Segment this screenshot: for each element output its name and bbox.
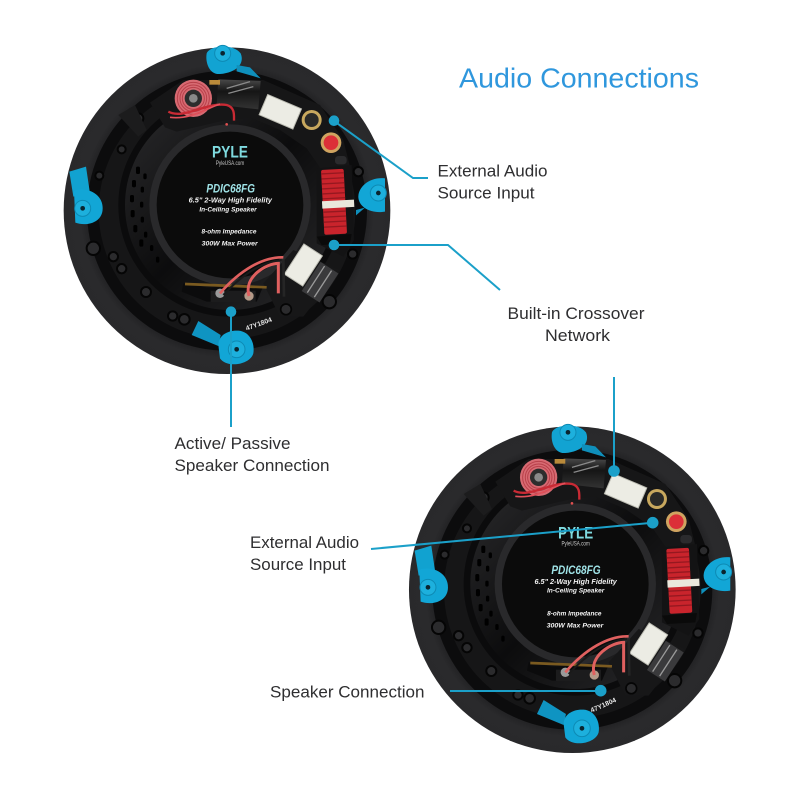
dot: external audio (top) bbox=[329, 115, 339, 126]
speaker label text: top unit: In-Ceiling Speaker bbox=[199, 207, 257, 214]
callout: external audio source input (top) bbox=[329, 115, 548, 202]
speaker artwork: bottom unit bbox=[409, 424, 736, 753]
text: active passive: Speaker Connection bbox=[174, 456, 330, 475]
text: external audio (bottom): Source Input bbox=[250, 555, 346, 574]
callout: built-in crossover network bbox=[329, 240, 645, 345]
dot: external audio (bottom) bbox=[647, 517, 658, 528]
text: external audio (top): External Audio bbox=[438, 162, 548, 181]
speaker label text: top unit: PyleUSA.com bbox=[216, 161, 244, 167]
speaker label text: bottom unit: 300W Max Power bbox=[547, 622, 604, 629]
dot: crossover bbox=[329, 240, 339, 250]
speaker label text: bottom unit: In-Ceiling Speaker bbox=[547, 588, 605, 595]
leader line: crossover bbox=[334, 245, 500, 290]
title: Audio Connections bbox=[459, 62, 699, 94]
text: crossover: Network bbox=[545, 326, 611, 345]
leader line: active passive bbox=[230, 312, 232, 427]
leader line: crossover (bottom) bbox=[613, 377, 615, 471]
speaker label text: top unit: 8-ohm Impedance bbox=[201, 230, 257, 236]
dot: crossover (bottom) bbox=[608, 465, 620, 477]
text: speaker connection: Speaker Connection bbox=[270, 683, 424, 702]
speaker label text: top unit: PDIC68FG bbox=[206, 181, 255, 195]
callout: external audio source input (bottom) bbox=[250, 517, 658, 574]
speaker label text: top unit bbox=[189, 142, 273, 333]
text: external audio (top): Source Input bbox=[438, 184, 535, 202]
dot: active passive bbox=[226, 306, 236, 317]
speaker: top unit bbox=[64, 45, 390, 374]
callout: active / passive speaker connection bbox=[174, 306, 330, 475]
leader line: external audio (bottom) bbox=[371, 523, 653, 549]
speaker label text: bottom unit: 47Y1804 bbox=[590, 697, 618, 714]
callout: crossover (bottom) bbox=[608, 377, 620, 477]
text: external audio (bottom): External Audio bbox=[250, 533, 359, 552]
leader line: speaker connection bbox=[450, 690, 600, 692]
leader line: external audio (top) bbox=[334, 121, 428, 178]
text: crossover: Built-in Crossover bbox=[508, 304, 645, 323]
speaker artwork: top unit bbox=[64, 45, 390, 374]
speaker label text: bottom unit: 6.5" 2-Way High Fidelity bbox=[534, 579, 618, 586]
speaker label text: top unit: 6.5" 2-Way High Fidelity bbox=[189, 198, 273, 205]
speaker label text: bottom unit: 8-ohm Impedance bbox=[547, 611, 602, 617]
speaker label text: bottom unit bbox=[534, 523, 618, 714]
speaker label text: top unit: 47Y1804 bbox=[245, 317, 273, 333]
text: active passive: Active/ Passive bbox=[174, 434, 290, 453]
speaker label text: bottom unit: PDIC68FG bbox=[551, 563, 601, 577]
speaker: bottom unit bbox=[409, 424, 736, 753]
speaker label text: bottom unit: PyleUSA.com bbox=[561, 541, 590, 547]
speaker label text: top unit: 300W Max Power bbox=[202, 241, 258, 248]
dot: speaker connection bbox=[595, 685, 606, 696]
speaker label text: bottom unit: PYLE bbox=[558, 523, 593, 542]
speaker label text: top unit: PYLE bbox=[212, 142, 248, 161]
callout: speaker connection (bottom) bbox=[270, 683, 606, 702]
